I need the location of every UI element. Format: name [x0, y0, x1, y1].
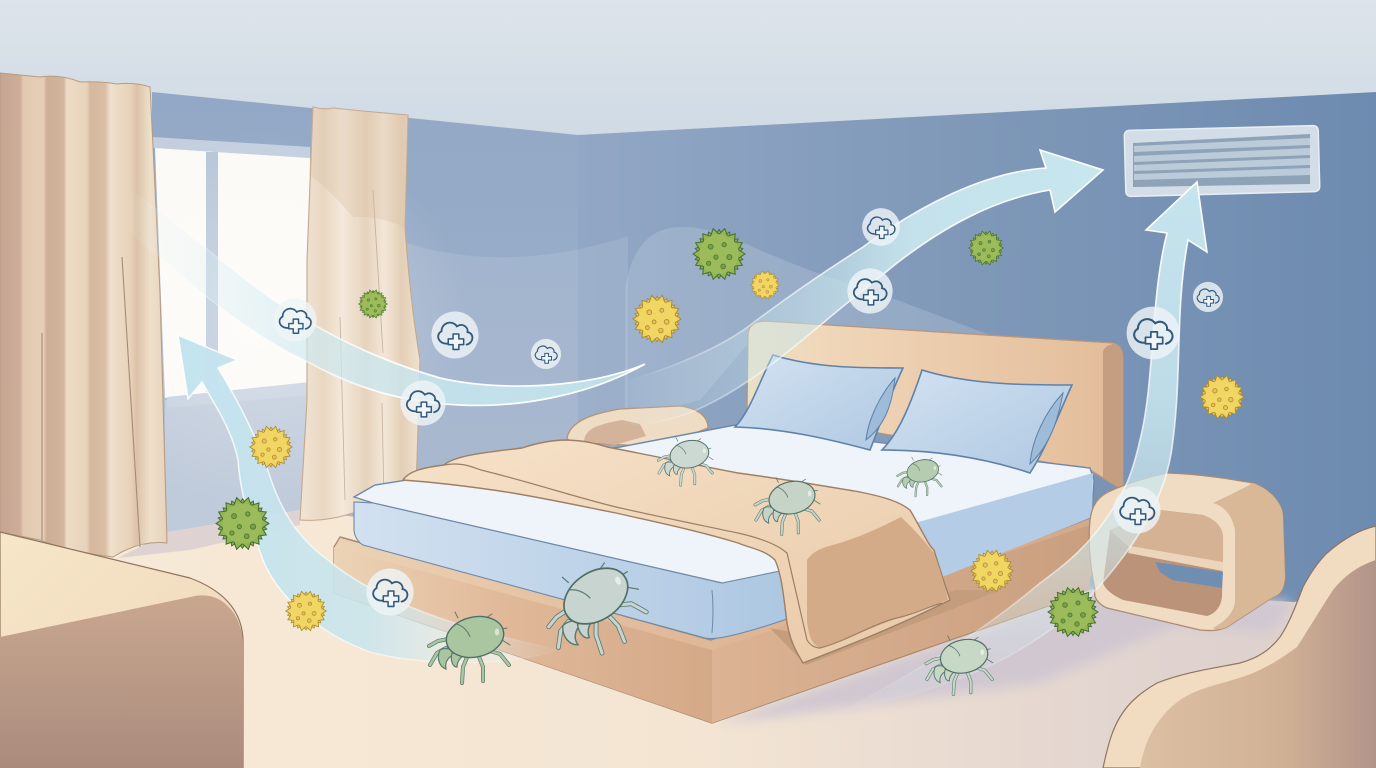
left nightstand	[567, 406, 708, 447]
pollen yellow 6	[968, 548, 1016, 594]
ceiling	[0, 0, 1376, 140]
dust mite climbing mattress	[533, 552, 655, 668]
mattress	[354, 425, 1094, 639]
right armchair	[1103, 526, 1376, 768]
floor	[0, 510, 1376, 768]
left curtain	[0, 73, 167, 557]
wall light band from window	[155, 150, 628, 620]
pollen yellow 4	[283, 589, 329, 633]
cloud icon 9	[1113, 486, 1161, 534]
cloud icon 4	[400, 380, 446, 426]
floor shadow right of bed	[716, 590, 1293, 724]
left wall	[152, 92, 578, 620]
dust mite on sheet	[897, 457, 942, 496]
pollen green 2	[357, 288, 389, 320]
pollen green 3	[967, 229, 1005, 267]
airflow arrow: from floor up to vent	[840, 182, 1207, 712]
window	[153, 137, 310, 408]
vent	[1124, 125, 1320, 197]
dust mite on floor	[926, 635, 993, 694]
dust mite on blanket	[755, 477, 820, 534]
right nightstand	[1089, 473, 1285, 631]
cloud icon 8	[1193, 282, 1223, 312]
airflow arrow: from window across the room	[130, 190, 645, 405]
pollen yellow 1	[630, 292, 684, 346]
cloud icon 2	[431, 311, 479, 359]
cloud icon 3	[531, 339, 561, 369]
cloud icon 10	[366, 568, 414, 616]
dust mite on bed base	[429, 611, 510, 683]
airflow arrow: lower left rising to window	[178, 335, 560, 663]
right wall	[578, 92, 1376, 620]
pollen green 4	[213, 494, 272, 553]
blanket	[403, 440, 950, 663]
bed base	[334, 518, 1092, 723]
cloud icon 7	[1127, 307, 1179, 359]
pollen green 5	[1045, 584, 1101, 640]
translucent haze panel	[625, 227, 990, 420]
left armchair	[0, 532, 243, 768]
pollen yellow 5	[1197, 373, 1247, 421]
pollen yellow 2	[749, 269, 781, 301]
headboard	[747, 321, 1123, 490]
dust mite on blanket back	[658, 437, 713, 485]
cloud icon 5	[862, 208, 900, 246]
pollen yellow 3	[247, 424, 295, 470]
cloud icon 6	[847, 268, 893, 314]
left pillow	[735, 355, 903, 450]
window light haze	[50, 130, 470, 510]
airflow arrow: rising to the vent	[630, 150, 1103, 425]
pollen green 1	[690, 225, 748, 283]
wall below window	[165, 385, 312, 535]
cloud icon 1	[273, 298, 317, 342]
right pillow	[882, 370, 1072, 473]
floor strip near curtain	[118, 510, 300, 558]
right curtain	[300, 107, 420, 520]
